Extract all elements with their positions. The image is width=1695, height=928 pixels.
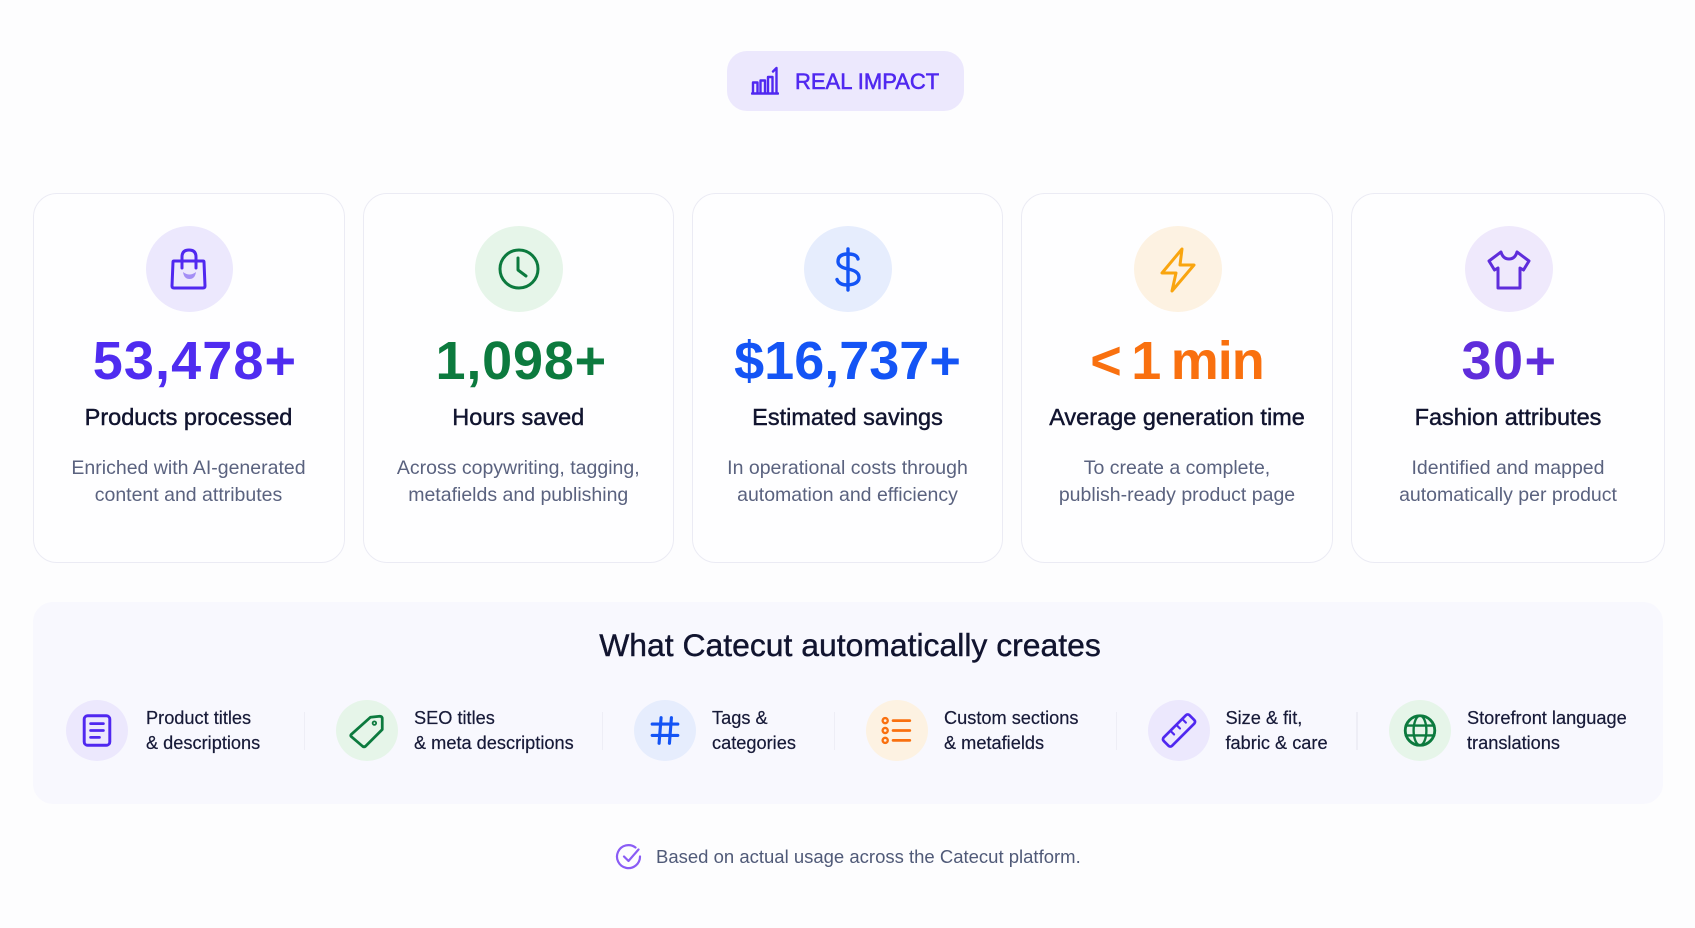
footer text: Based on actual usage across the Catecut platform.: [656, 846, 1081, 867]
item text: product titles: Product titles: [146, 708, 251, 728]
item icon: hash: [634, 700, 696, 760]
item text: size and fit: [1226, 708, 1328, 752]
description: Identified and mapped: [1412, 457, 1604, 479]
description: [727, 457, 968, 506]
description: [71, 457, 306, 506]
item text: tags: categories: [712, 732, 796, 752]
icon: t-shirt: [1464, 226, 1552, 312]
badge label: REAL IMPACT: [795, 68, 939, 94]
stat card: average generation time: [1021, 193, 1333, 563]
label: Fashion attributes: [1415, 404, 1601, 430]
icon: check circle: [616, 844, 642, 870]
item text: custom sections: & metafields: [944, 732, 1044, 752]
value: 30+: [1461, 331, 1558, 391]
stat card: estimated savings: [692, 193, 1003, 563]
item text: SEO titles: [414, 708, 574, 754]
item text: size and fit: Size & fit,: [1226, 708, 1302, 728]
stat card: fashion attributes: [1351, 193, 1665, 563]
icon: lightning bolt: [1134, 226, 1222, 312]
description: publish-ready product page: [1059, 484, 1295, 506]
item text: custom sections: Custom sections: [944, 708, 1078, 728]
item icon: ruler: [1148, 700, 1210, 760]
item text: size and fit: fabric & care: [1226, 732, 1328, 752]
icon: shopping bag: [146, 226, 232, 312]
item text: tags: [712, 708, 796, 754]
item icon: tag: [336, 700, 398, 760]
icon: clock: [474, 226, 562, 312]
icon: bar chart: [751, 66, 779, 95]
description: [1059, 457, 1295, 506]
item text: tags: Tags &: [712, 708, 768, 728]
description: [397, 457, 640, 506]
item text: translations: [1467, 708, 1627, 752]
description: In operational costs through: [727, 457, 968, 479]
item text: custom sections: [944, 708, 1078, 752]
item icon: list: [866, 700, 928, 760]
description: To create a complete,: [1084, 457, 1270, 479]
footer note: [616, 844, 1081, 870]
icon: dollar: [804, 226, 892, 312]
stat card: hours saved: [363, 193, 674, 563]
item text: product titles: [146, 708, 260, 754]
item icon: globe: [1388, 700, 1450, 760]
item text: product titles: & descriptions: [146, 732, 260, 752]
badge: real impact: [727, 51, 964, 111]
stat card: products processed: [32, 193, 344, 563]
description: content and attributes: [95, 484, 282, 506]
item text: translations: Storefront language: [1467, 708, 1627, 728]
description: automation and efficiency: [737, 484, 958, 506]
description: metafields and publishing: [408, 484, 628, 506]
label: Average generation time: [1049, 404, 1305, 430]
description: [1399, 457, 1617, 506]
label: Estimated savings: [752, 404, 943, 430]
value: < 1 min: [1090, 331, 1264, 391]
item text: SEO titles: SEO titles: [414, 708, 495, 728]
value: 1,098+: [436, 331, 607, 391]
value: $16,737+: [734, 331, 961, 391]
label: Products processed: [85, 404, 292, 430]
value: 53,478+: [93, 331, 297, 391]
description: automatically per product: [1399, 484, 1617, 506]
description: Enriched with AI-generated: [71, 457, 306, 479]
item icon: document: [66, 700, 128, 760]
item text: translations: translations: [1467, 732, 1560, 752]
label: Hours saved: [452, 404, 584, 430]
description: Across copywriting, tagging,: [397, 457, 640, 479]
panel: what Catecut automatically creates: [33, 602, 1663, 804]
item text: SEO titles: & meta descriptions: [414, 732, 574, 752]
panel heading: What Catecut automatically creates: [599, 627, 1101, 663]
